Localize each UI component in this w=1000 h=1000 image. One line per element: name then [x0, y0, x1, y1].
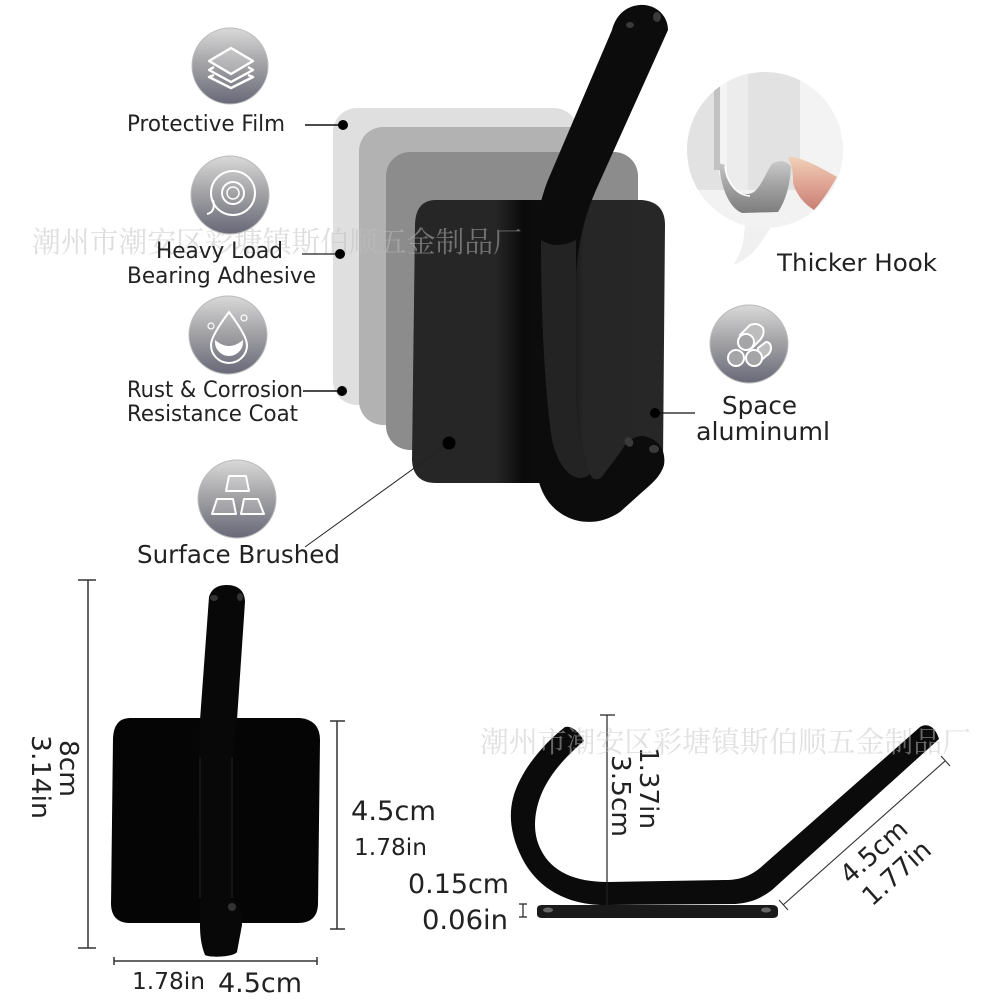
plate width dimension: [330, 721, 436, 929]
thickness dimension: 0.15cm: [408, 869, 509, 900]
front view product: [111, 585, 320, 957]
front plate: [111, 718, 320, 923]
hook body: [533, 5, 668, 522]
main product: black hook: [412, 5, 668, 522]
thickness dimension: 0.06in: [422, 905, 508, 936]
hook depth dimension: [600, 715, 663, 905]
arm length dimension: 4.5cm: [835, 814, 914, 890]
label: rust and corrosion resistance coat: Rust & Corrosion: [127, 378, 303, 403]
label: surface brushed: Surface Brushed: [137, 540, 340, 569]
side view product: [511, 725, 939, 918]
side hook: [511, 725, 939, 905]
hook depth dimension: 1.37in: [633, 747, 663, 829]
watermark bottom: 潮州市潮安区彩塘镇斯伯顺五金制品厂: [480, 720, 971, 761]
layered adhesive sheets: [333, 108, 638, 450]
side plate highlights: [543, 908, 771, 912]
leader: corrosion coat: [303, 386, 347, 396]
layer: protective film: [333, 108, 578, 405]
front hook stem: [199, 585, 245, 957]
plate width dimension: 1.78in: [354, 835, 427, 861]
watermark top: 潮州市潮安区彩塘镇斯伯顺五金制品厂: [32, 220, 522, 261]
hook depth dimension: 3.5cm: [605, 755, 635, 837]
bottom width dimension: 1.78in: [132, 969, 205, 995]
bottom width dimension: [114, 957, 317, 999]
label: thicker hook: Thicker Hook: [776, 249, 937, 277]
front view dimension: height: 8cm: [53, 740, 83, 797]
label: space aluminum: [696, 391, 830, 446]
plate width dimension: 4.5cm: [351, 796, 436, 827]
front hook tip facets: [210, 593, 243, 911]
icon: layers: [192, 28, 268, 104]
label: protective film: Protective Film: [127, 112, 285, 137]
icon: aluminum rods: [710, 305, 788, 383]
leader: protective film: [305, 120, 348, 130]
icon: metal ingots: [198, 460, 276, 538]
icon: adhesive roll: [191, 156, 269, 234]
front view dimension: height: [25, 580, 96, 948]
label: space aluminum: aluminuml: [696, 417, 830, 446]
thickness dimension: [408, 869, 527, 936]
callout: thicker hook detail bubble: [685, 70, 850, 265]
label: heavy load bearing adhesive: Heavy Load: [156, 239, 283, 264]
side plate: [537, 905, 778, 918]
label: rust and corrosion resistance coat: Resistance Coat: [127, 402, 298, 427]
back plate: [412, 200, 665, 483]
label: heavy load bearing adhesive: Bearing Adhesive: [127, 264, 316, 289]
bottom width dimension: 4.5cm: [218, 968, 302, 999]
front hook edge lines: [200, 757, 232, 898]
arm length dimension: 1.77in: [857, 835, 938, 912]
label: rust and corrosion resistance coat: [127, 378, 303, 427]
icon: water drop: [189, 296, 267, 374]
hook front highlight: [541, 240, 590, 478]
arm length dimension: [779, 756, 950, 912]
label: space aluminum: Space: [722, 391, 797, 420]
front view dimension: height: 3.14in: [25, 735, 55, 819]
label: heavy load bearing adhesive: [127, 239, 316, 289]
leader: space aluminum: [650, 408, 695, 418]
hook tip facets: [623, 12, 661, 453]
leader: surface brushed: [305, 436, 456, 547]
layer: corrosion coat: [386, 152, 638, 450]
leader: adhesive: [302, 249, 345, 259]
layer: adhesive: [359, 127, 604, 425]
